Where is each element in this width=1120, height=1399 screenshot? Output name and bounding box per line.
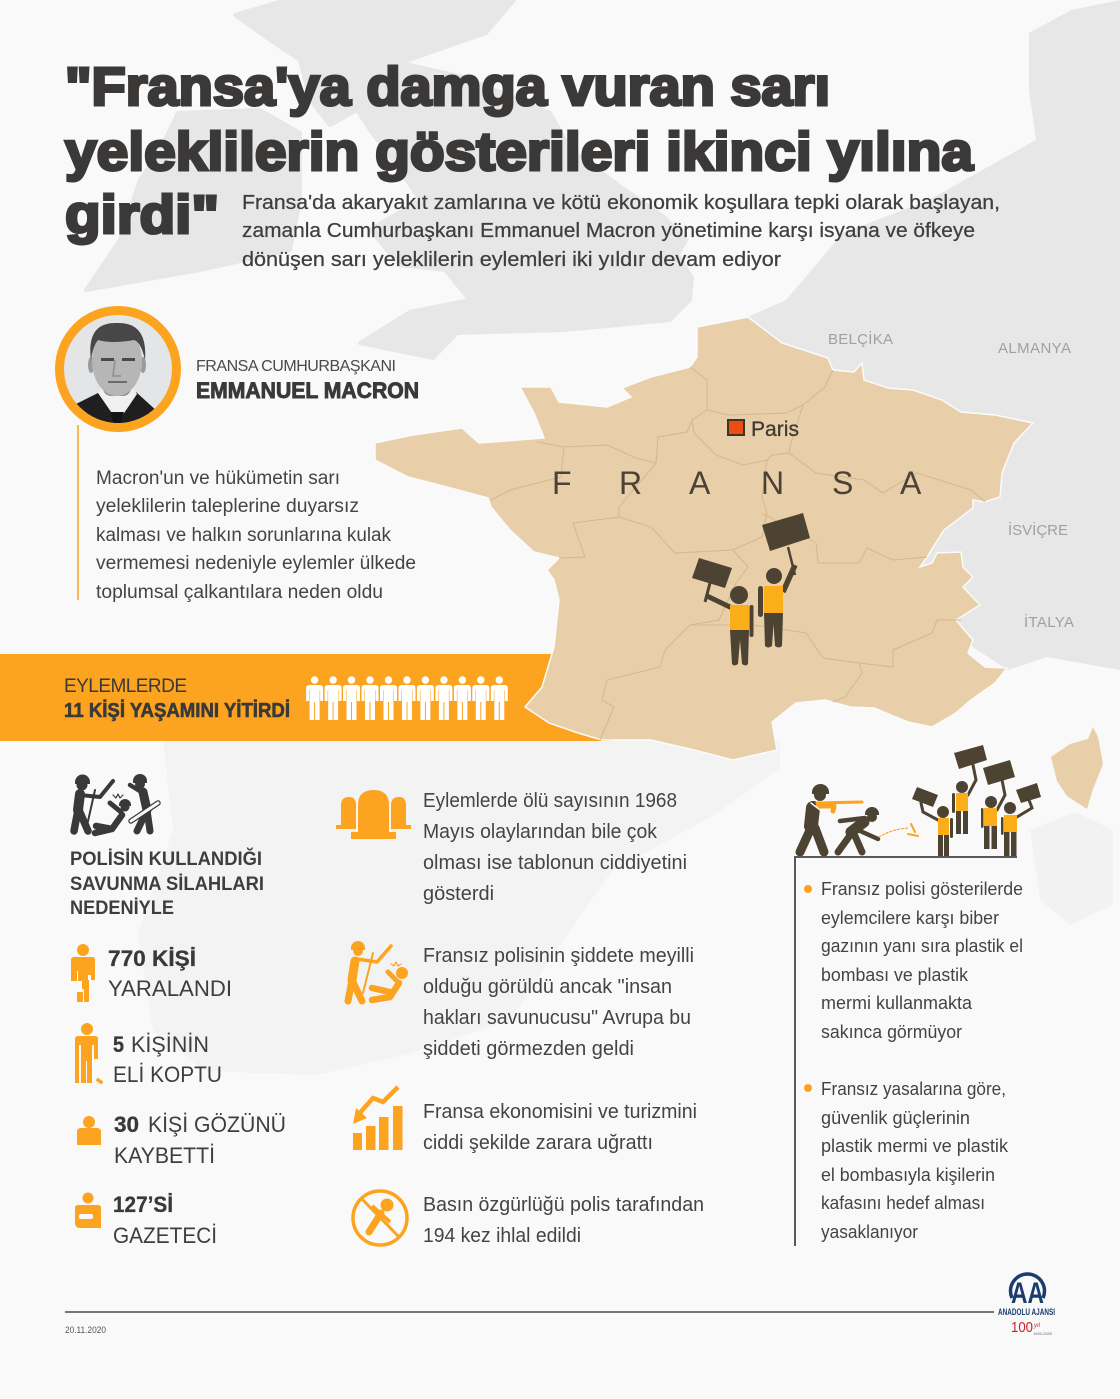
icon: falling economy: [353, 1087, 402, 1150]
stat: 30 lost an eye: 30: [114, 1112, 139, 1137]
name block: EMMANUEL MACRON: [196, 378, 419, 403]
bullet text 2: yasaklanıyor: [821, 1222, 918, 1242]
map of Corsica: [1051, 727, 1103, 809]
stat: 30 lost an eye: [77, 1112, 286, 1168]
bullet text 2: Fransız yasalarına göre,: [821, 1079, 1006, 1099]
icon: person with lost eye: [77, 1116, 101, 1145]
paragraph: Macron: [96, 468, 416, 603]
country labels: İSVİÇRE: [1008, 521, 1068, 539]
text: economy: ciddi şekilde zarara uğrattı: [423, 1132, 653, 1154]
text: police violence: hakları savunucusu" Avrupa bu: [423, 1007, 691, 1029]
paragraph: Macron: kalması ve halkın sorunlarına kulak: [96, 525, 391, 546]
heading: police weapons: SAVUNMA SİLAHLARI: [70, 874, 264, 895]
orange casualties band: [0, 654, 610, 741]
footer line and date: 20.11.2020: [65, 1325, 106, 1335]
text: death toll: Eylemlerde ölü sayısının 1968: [423, 790, 677, 812]
illustration: police and protesters: [800, 745, 1041, 857]
text: press freedom: [423, 1194, 704, 1247]
text: press freedom: 194 kez ihlal edildi: [423, 1225, 581, 1247]
logo: Anadolu Ajansı: AA: [1011, 1277, 1044, 1310]
protester 2: [952, 745, 987, 834]
icon: police beating a protester: [74, 774, 158, 833]
background map: neighbouring countries: [86, 0, 1120, 1075]
stat: 127 journalists: [75, 1192, 217, 1248]
bullet text 1: mermi kullanmakta: [821, 993, 973, 1013]
logo: Anadolu Ajansı: yıl: [1033, 1323, 1041, 1329]
icon: tombstones: [336, 790, 411, 839]
paragraph: Macron: toplumsal çalkantılara neden oldu: [96, 582, 383, 603]
title: "Fransa'ya damga vuran sarı: [65, 57, 830, 117]
text: police violence: şiddeti görmezden geldi: [423, 1038, 634, 1060]
stat: 5 lost a hand: KİŞİNİN: [131, 1032, 209, 1057]
bullet text 1: bombası ve plastik: [821, 965, 969, 985]
text: economy: [423, 1101, 697, 1154]
title: girdi": [65, 185, 219, 245]
bullet text 1: Fransız polisi gösterilerde: [821, 879, 1023, 899]
title: yeleklilerin gösterileri ikinci yılına: [65, 122, 974, 182]
bullet text 2: el bombasıyla kişilerin: [821, 1165, 995, 1185]
stat: 127 journalists: GAZETECİ: [113, 1223, 217, 1248]
protester 1: [912, 787, 953, 857]
icon: journalist: [75, 1192, 101, 1228]
text: police violence: Fransız polisinin şiddete meyilli: [423, 945, 694, 967]
stat: 770 injured: 770 KİŞİ: [108, 946, 196, 971]
stat: 5 lost a hand: 5: [113, 1032, 124, 1057]
text: police violence: [423, 945, 694, 1060]
name block: [196, 358, 419, 403]
subtitle: zamanla Cumhurbaşkanı Emmanuel Macron yönetimine karşı isyana ve öfkeye: [242, 220, 975, 242]
bullet text 1: [804, 879, 1023, 1042]
protester 3: [981, 760, 1015, 849]
bullet text 2: plastik mermi ve plastik: [821, 1136, 1009, 1156]
band text: [64, 676, 290, 722]
stat: 127 journalists: 127’Sİ: [113, 1192, 173, 1217]
bullet text 2: güvenlik güçlerinin: [821, 1108, 970, 1128]
map of France: [375, 317, 1033, 760]
bracket frame: [795, 857, 1017, 1246]
logo: Anadolu Ajansı: 100: [1011, 1319, 1033, 1336]
heading: police weapons: POLİSİN KULLANDIĞI: [70, 848, 262, 870]
bullet text 2: kafasını hedef alması: [821, 1193, 985, 1213]
logo: Anadolu Ajansı: [998, 1274, 1055, 1336]
bullet text 1: gazının yanı sıra plastik el: [821, 936, 1023, 956]
France label: FRANSA: [552, 465, 922, 501]
bullet text 1: sakınca görmüyor: [821, 1022, 962, 1042]
logo: Anadolu Ajansı: ANADOLU AJANSI: [998, 1307, 1055, 1317]
text: death toll: gösterdi: [423, 883, 494, 905]
text: death toll: olması ise tablonun ciddiyetini: [423, 852, 687, 874]
stat: 770 injured: [71, 944, 232, 1002]
stat: 30 lost an eye: KAYBETTİ: [114, 1143, 215, 1168]
stat: 5 lost a hand: [75, 1023, 222, 1087]
subtitle: dönüşen sarı yeleklilerin eylemleri iki yıldır devam ediyor: [242, 249, 781, 271]
police with gun: [800, 784, 862, 852]
police throwing grenade: [838, 807, 879, 852]
icon: injured person: [71, 944, 95, 1002]
stat: 5 lost a hand: ELİ KOPTU: [113, 1062, 222, 1087]
band text: EYLEMLERDE: [64, 676, 187, 697]
country labels: BELÇİKA: [828, 330, 893, 348]
paragraph: Macron: yeleklilerin taleplerine duyarsız: [96, 496, 359, 517]
country labels: ALMANYA: [998, 340, 1071, 357]
title: [65, 57, 974, 245]
logo: Anadolu Ajansı: 1920-2020: [1033, 1331, 1053, 1336]
leader line: [77, 425, 79, 600]
heading: police weapons: NEDENİYLE: [70, 898, 174, 919]
grenade trajectory: [879, 824, 918, 837]
band text: 11 KİŞİ YAŞAMINI YİTİRDİ: [64, 699, 290, 722]
paragraph: Macron: Macron'un ve hükümetin sarı: [96, 468, 340, 489]
stat: 770 injured: YARALANDI: [108, 976, 232, 1001]
Paris marker: [728, 418, 799, 441]
Paris marker: Paris: [751, 418, 799, 441]
icon: protesters on map: [692, 513, 810, 666]
name block: FRANSA CUMHURBAŞKANI: [196, 358, 396, 375]
icon: person with lost hand: [75, 1023, 103, 1085]
text: death toll: Mayıs olaylarından bile çok: [423, 821, 658, 843]
icon row: 11 people: [306, 676, 508, 720]
icon: press freedom banned: [353, 1191, 407, 1245]
protester 4: [1001, 783, 1041, 857]
country labels: İTALYA: [1024, 613, 1074, 631]
subtitle: Fransa'da akaryakıt zamlarına ve kötü ekonomik koşullara tepki olarak başlayan,: [242, 192, 1000, 214]
portrait: Emmanuel Macron: [60, 310, 176, 430]
text: press freedom: Basın özgürlüğü polis tarafından: [423, 1194, 704, 1216]
heading: police weapons: [70, 848, 264, 919]
text: economy: Fransa ekonomisini ve turizmini: [423, 1101, 697, 1123]
paragraph: Macron: vermemesi nedeniyle eylemler ülkede: [96, 553, 416, 574]
icon: police violence: [348, 941, 408, 1001]
text: death toll: [423, 790, 687, 905]
text: police violence: olduğu görüldü ancak "insan: [423, 976, 672, 998]
stat: 30 lost an eye: KİŞİ GÖZÜNÜ: [148, 1112, 286, 1137]
country labels: [828, 330, 1074, 631]
bullet text 1: eylemcilere karşı biber: [821, 908, 999, 928]
subtitle: [242, 192, 1000, 271]
bullet text 2: [804, 1079, 1009, 1242]
